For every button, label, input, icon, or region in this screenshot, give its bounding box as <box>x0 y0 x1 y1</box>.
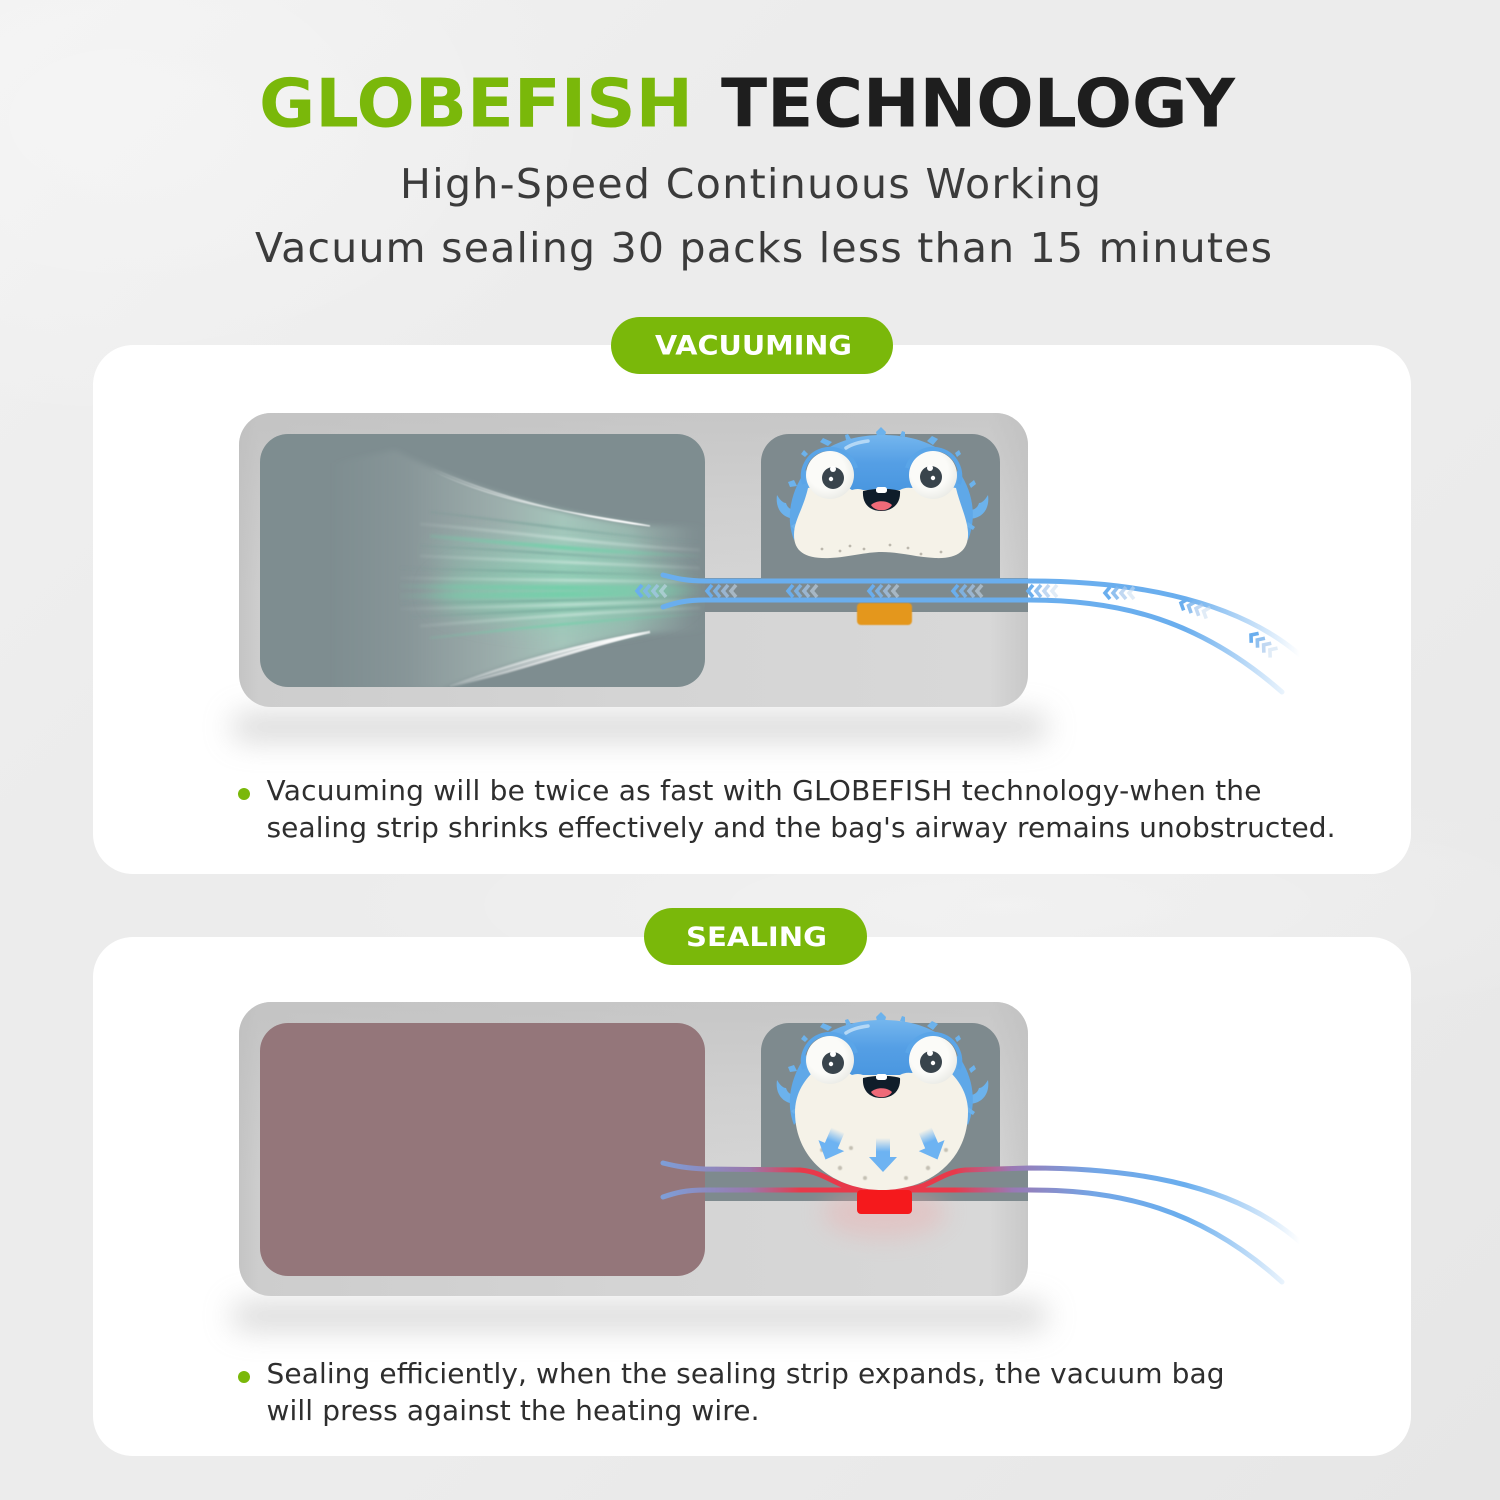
vacuum bag pressed against wire <box>663 1163 1300 1282</box>
fish compartment <box>761 1023 1000 1167</box>
channel <box>705 1167 1028 1201</box>
panel card background <box>93 345 1411 874</box>
badge: sealing <box>644 908 867 965</box>
sealed chamber <box>260 1023 705 1276</box>
pressure arrows <box>813 1125 950 1172</box>
description: sealing: will press against the heating wire. <box>266 1394 760 1427</box>
badge: sealing: SEALING <box>686 922 827 953</box>
description: sealing: Sealing efficiently, when the sealing strip expands, the vacuum bag <box>266 1357 1224 1390</box>
description: sealing <box>238 1357 1224 1427</box>
badge: vacuuming <box>611 317 893 374</box>
air channel <box>705 578 1028 612</box>
device diagram: vacuuming <box>239 413 1300 707</box>
panel: vacuuming <box>93 317 1411 874</box>
heating wire: idle <box>857 603 912 625</box>
vacuum bag tube with airflow chevrons <box>637 575 1300 692</box>
panel card background <box>93 937 1411 1456</box>
subtitle: Vacuum sealing 30 packs less than 15 minutes <box>255 224 1272 272</box>
subtitle: High-Speed Continuous Working <box>400 160 1101 208</box>
heating wire: active <box>857 1190 912 1214</box>
title: GLOBEFISH <box>259 64 693 142</box>
title: TECHNOLOGY <box>721 64 1236 142</box>
description: vacuuming <box>238 774 1336 844</box>
device diagram: sealing <box>239 1002 1300 1296</box>
fish compartment <box>761 434 1000 578</box>
title <box>259 64 1236 142</box>
badge: vacuuming: VACUUMING <box>655 330 852 362</box>
panel: sealing <box>93 908 1411 1456</box>
vacuum chamber with air flow <box>260 434 705 690</box>
globefish: inflated <box>777 1012 988 1190</box>
device shadow <box>232 1303 1047 1329</box>
description: vacuuming: sealing strip shrinks effectively and the bag's airway remains unobstructed. <box>266 811 1336 844</box>
globefish: deflated <box>777 427 988 558</box>
device shadow <box>232 714 1047 740</box>
description: vacuuming: Vacuuming will be twice as fast with GLOBEFISH technology-when the <box>266 774 1262 807</box>
subtitle <box>255 160 1272 272</box>
heating wire glow <box>822 1186 946 1238</box>
